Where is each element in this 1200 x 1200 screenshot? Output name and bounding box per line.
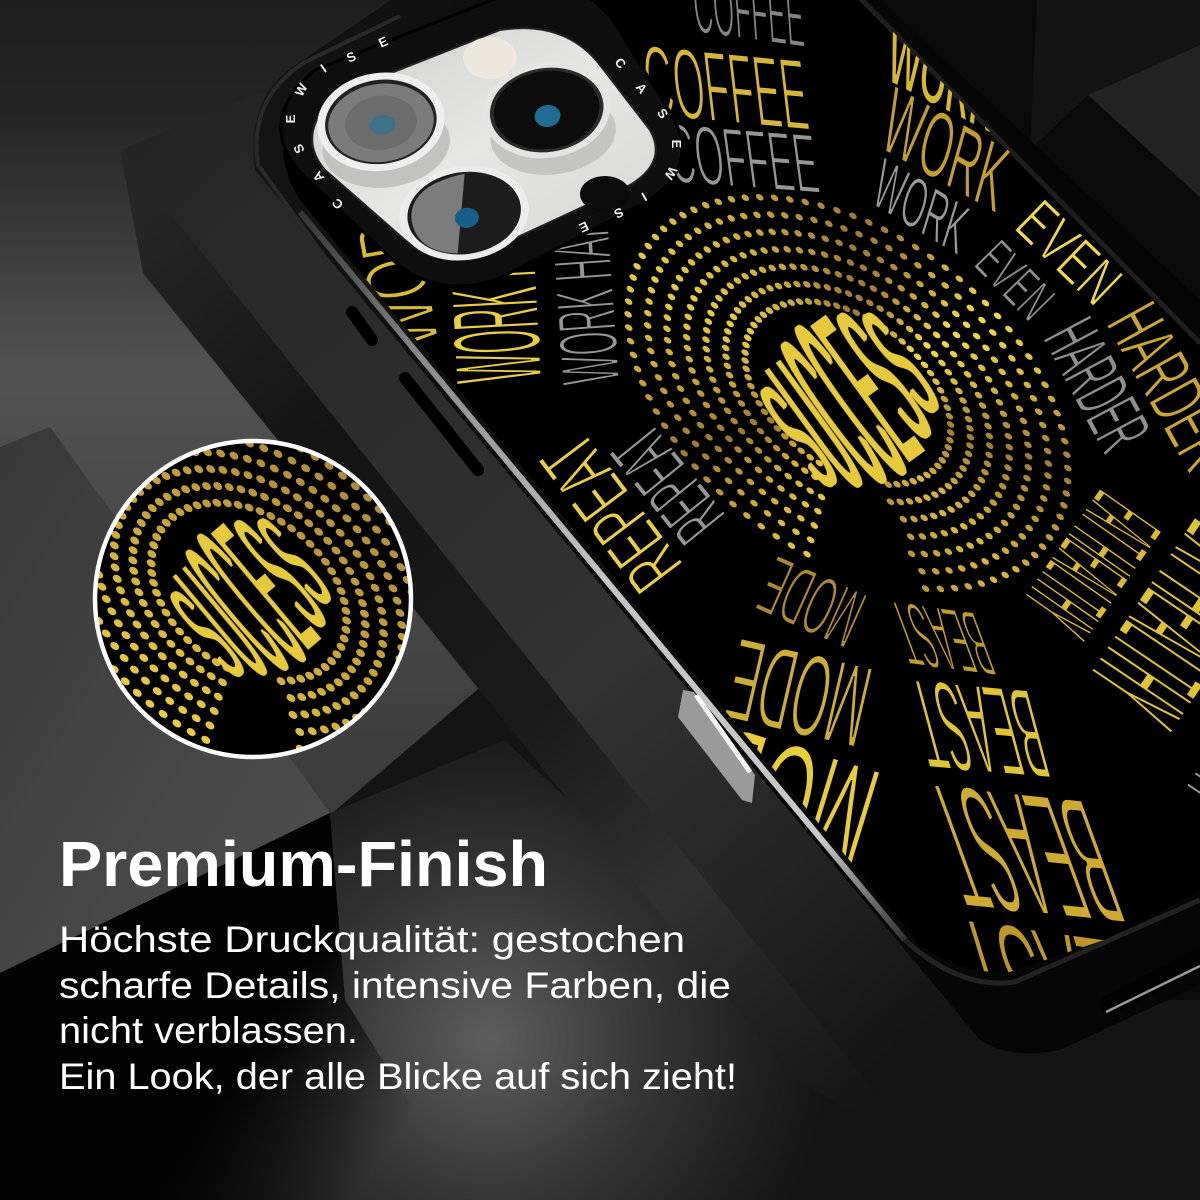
camera ring branding: CASEWISE: C bbox=[612, 55, 630, 72]
magnifier SUCCESS lettering: E bbox=[179, 485, 352, 687]
magnifier SUCCESS lettering: U bbox=[146, 534, 299, 712]
camera ring branding: CASEWISE: E bbox=[376, 33, 390, 51]
camera ring branding: CASEWISE: E bbox=[669, 140, 684, 149]
phone case rim bbox=[257, 16, 400, 285]
text: work even harder outer row: WORK bbox=[884, 11, 1000, 150]
camera ring branding: CASEWISE: S bbox=[654, 106, 672, 122]
lens: top left bbox=[311, 64, 455, 196]
side button: chrome bbox=[678, 690, 755, 803]
camera ring branding: CASEWISE: I bbox=[318, 61, 329, 75]
phone case body bbox=[253, 0, 1200, 1053]
magnifier SUCCESS lettering: S bbox=[145, 563, 269, 706]
text: eat healthy rows bbox=[1025, 490, 1200, 794]
text: repeat rows: REPEAT bbox=[595, 409, 740, 560]
SUCCESS oval lettering: S bbox=[836, 280, 965, 446]
body text bbox=[59, 919, 737, 1097]
camera ring branding: CASEWISE: A bbox=[633, 80, 651, 97]
body text: Ein Look, der alle Blicke auf sich zieht! bbox=[59, 1056, 737, 1097]
body text: nicht verblassen. bbox=[59, 1010, 358, 1051]
SUCCESS oval lettering: S bbox=[734, 354, 863, 520]
camera ring branding: CASEWISE: C bbox=[328, 195, 346, 212]
text: beast mode rows bbox=[726, 556, 1125, 972]
phone frame corner edge bbox=[905, 900, 1200, 983]
text: work even harder outer row: EVEN bbox=[1002, 186, 1136, 319]
text: repeat rows bbox=[539, 428, 724, 594]
dotted keyhole rings bbox=[624, 194, 1072, 592]
side button slot: upper bbox=[352, 312, 372, 340]
text: work even harder outer row bbox=[873, 11, 1200, 484]
block: large top face bbox=[120, 92, 1000, 1160]
camera flash bbox=[463, 37, 517, 79]
text: coffee rows bbox=[646, 0, 820, 192]
detail magnifier circle bbox=[92, 438, 414, 760]
background: lit floor bbox=[0, 740, 1000, 1200]
camera ring branding: CASEWISE: S bbox=[290, 142, 308, 156]
lens: bottom bbox=[393, 158, 535, 269]
text: work hard rows: WORK bbox=[332, 174, 460, 359]
magnifier dotted rings bbox=[98, 443, 409, 749]
text: work even harder grey row bbox=[866, 142, 1168, 465]
text: beast mode rows: BEAST bbox=[940, 879, 1200, 1107]
magnifier SUCCESS lettering: S bbox=[232, 490, 356, 633]
phone right edge highlight bbox=[858, 0, 1200, 343]
magnifier SUCCESS lettering: C bbox=[159, 492, 342, 704]
camera module ring bbox=[281, 0, 682, 286]
camera ring branding: CASEWISE: W bbox=[661, 164, 680, 183]
background: upper right top band bbox=[1030, 0, 1200, 150]
phone artwork: typography fan: EAT HEALTHY bbox=[1002, 473, 1183, 657]
phone chrome edge bbox=[300, 212, 905, 940]
SUCCESS oval lettering: C bbox=[744, 296, 922, 530]
lens: top right bbox=[477, 53, 621, 183]
phone artwork: typography fan: MODE bbox=[631, 673, 897, 919]
SUCCESS oval lettering: U bbox=[736, 321, 895, 528]
phone print surface bbox=[283, 0, 1200, 972]
block: lower left front face bbox=[0, 813, 470, 1200]
camera ring branding: CASEWISE bbox=[283, 33, 684, 236]
camera ring branding: CASEWISE: A bbox=[309, 168, 327, 185]
camera ring branding: CASEWISE: W bbox=[292, 80, 311, 99]
body text: scharfe Details, intensive Farben, die bbox=[59, 965, 731, 1006]
magnifier SUCCESS lettering: C bbox=[150, 510, 323, 711]
phone artwork: typography fan: COFFEE bbox=[662, 105, 824, 212]
block: large front face bbox=[120, 150, 930, 1160]
camera ring branding: CASEWISE: S bbox=[612, 204, 626, 222]
camera ring branding: CASEWISE: E bbox=[577, 218, 591, 236]
block: lower left top face bbox=[0, 427, 330, 973]
heading: Premium-Finish bbox=[59, 828, 548, 900]
text: beast mode rows: BEAST bbox=[898, 651, 1061, 805]
text: beast mode rows: MODE bbox=[716, 612, 882, 772]
SUCCESS oval lettering: C bbox=[757, 278, 944, 525]
magnifier SUCCESS lettering: S bbox=[203, 485, 357, 663]
background: upper right lit face bbox=[1088, 45, 1200, 197]
background: upper right block bbox=[840, 0, 1200, 1000]
text: beast mode rows: BEAST bbox=[878, 580, 1006, 696]
text: beast mode rows: BEAST bbox=[907, 744, 1144, 963]
side button slot: long bbox=[405, 378, 478, 470]
text: work hard rows bbox=[360, 232, 618, 386]
text: work even harder grey row: EVEN bbox=[963, 229, 1067, 333]
phone artwork: typography fan bbox=[332, 0, 1200, 1107]
camera microphone hole bbox=[580, 176, 630, 212]
text: beast mode rows: MODE bbox=[746, 537, 878, 665]
background: left wall bbox=[0, 0, 700, 970]
camera ring branding: CASEWISE: E bbox=[283, 114, 298, 123]
body text: Höchste Druckqualität: gestochen bbox=[59, 919, 685, 960]
phone artwork: typography fan: COFFEE bbox=[637, 24, 814, 153]
camera window bbox=[312, 28, 656, 258]
text: work even harder grey row: WORK bbox=[866, 142, 977, 271]
camera ring branding: CASEWISE: S bbox=[344, 48, 358, 66]
SUCCESS oval lettering: S bbox=[804, 272, 963, 479]
SUCCESS oval lettering: E bbox=[778, 271, 956, 505]
text: work even harder outer row: WORK bbox=[873, 67, 1019, 233]
bottom port bbox=[1106, 958, 1200, 1012]
text: repeat rows: REPEAT bbox=[524, 417, 699, 608]
camera ring branding: CASEWISE: I bbox=[639, 189, 650, 204]
